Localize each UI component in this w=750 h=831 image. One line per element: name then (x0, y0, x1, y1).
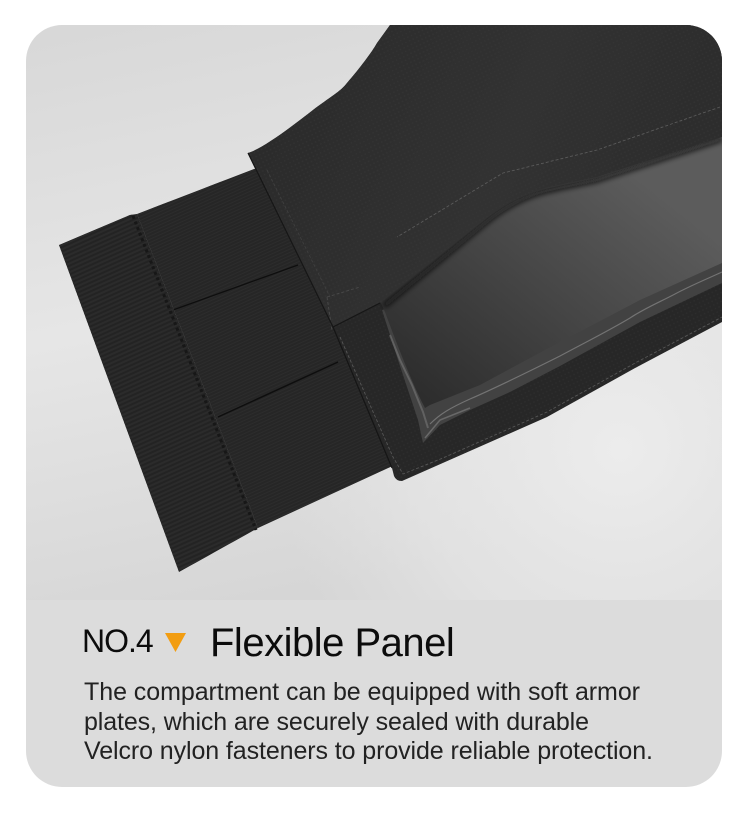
flap left edge (333, 327, 392, 468)
icon: orange triangle (165, 633, 186, 652)
flap stitching (340, 317, 722, 474)
velcro strip (59, 214, 258, 572)
heading: Flexible Panel (210, 621, 454, 665)
upper fabric pocket (248, 25, 722, 330)
plate edge highlights (430, 272, 722, 424)
description: plates, which are securely sealed with durable (84, 708, 589, 736)
number label: NO.4 (82, 623, 153, 659)
description: Velcro nylon fasteners to provide reliable protection. (84, 737, 653, 765)
pocket line: upper (173, 265, 298, 310)
description: The compartment can be equipped with soft armor (84, 678, 640, 706)
pocket hem stitching (397, 107, 720, 237)
translucent plate edge (382, 263, 722, 443)
flap behind the armor plate (248, 25, 722, 481)
plate surface (381, 137, 722, 408)
description (84, 678, 653, 765)
caption panel (26, 600, 722, 787)
cross seam (327, 287, 360, 330)
elastic strap with pockets (137, 168, 391, 528)
pocket bottom seam (248, 153, 380, 327)
photo: flexible panel product (26, 25, 722, 600)
photo background (26, 25, 722, 600)
pocket line: lower (218, 362, 338, 417)
shadow under fabric lip (384, 139, 722, 306)
soft armor plate (375, 110, 722, 443)
side stitching (267, 170, 330, 297)
